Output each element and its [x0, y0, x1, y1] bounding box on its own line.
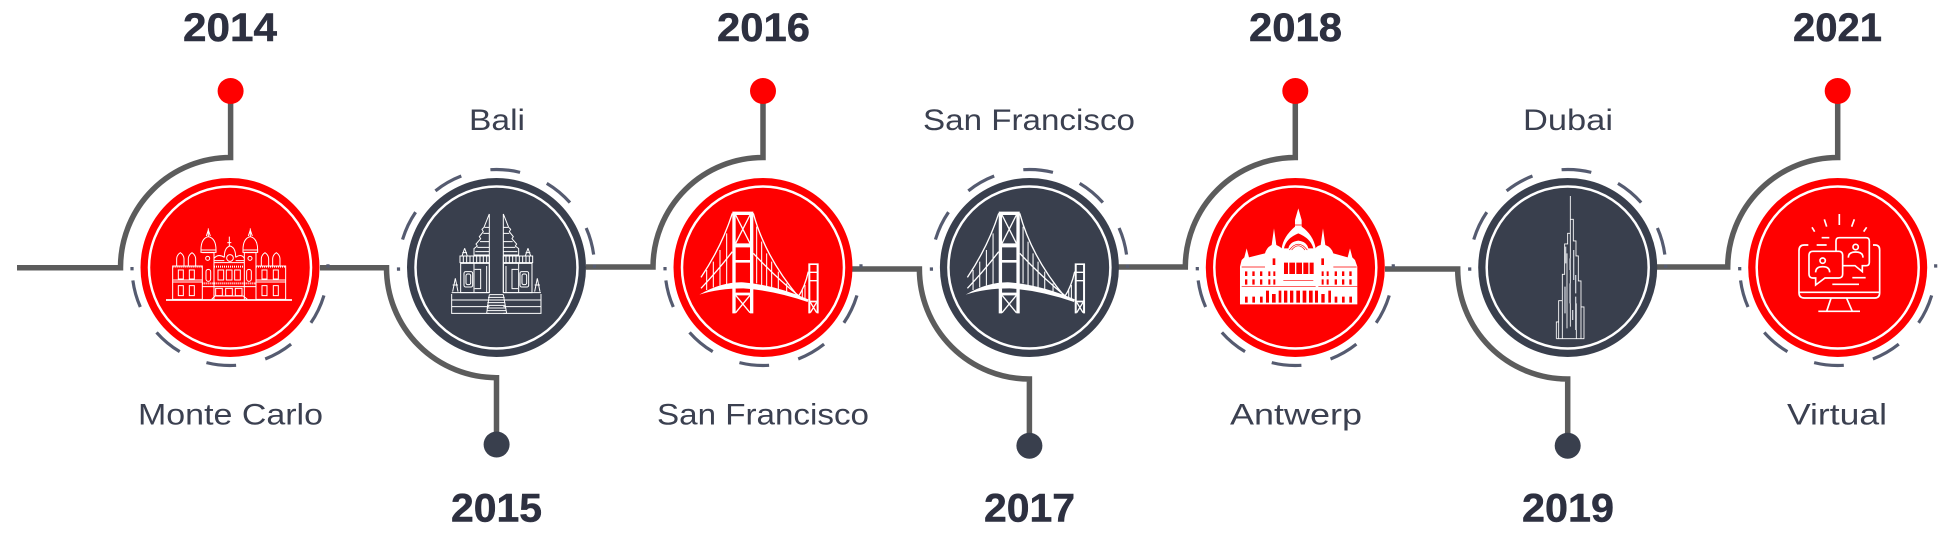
location: San Francisco: San Francisco	[923, 104, 1135, 137]
milestone 2017 San Francisco	[907, 104, 1152, 531]
location: Dubai: Dubai	[1523, 104, 1613, 137]
location: Antwerp: Antwerp	[1230, 398, 1362, 431]
dark pin	[1016, 433, 1042, 459]
icon: Bali split gate	[452, 214, 541, 313]
dark disc	[1478, 178, 1657, 357]
inner ring	[416, 186, 578, 348]
year 2018: 2018	[1249, 6, 1342, 50]
dark disc	[407, 178, 586, 357]
inner ring	[1214, 186, 1376, 348]
location: Monte Carlo: Monte Carlo	[138, 398, 323, 431]
red pin	[218, 78, 244, 104]
icon: Golden Gate bridge	[699, 212, 819, 313]
connector 2016	[586, 91, 763, 267]
red disc	[1206, 178, 1385, 357]
red pin	[1282, 78, 1308, 104]
location: Bali: Bali	[469, 104, 525, 137]
inner ring	[948, 186, 1110, 348]
inner ring	[149, 186, 311, 348]
year 2019: 2019	[1522, 487, 1614, 531]
year 2014: 2014	[183, 6, 278, 50]
dashed ring	[1173, 145, 1418, 390]
inner ring	[1757, 186, 1919, 348]
dashed ring	[1445, 145, 1690, 390]
icon: Monte Carlo casino	[166, 228, 292, 300]
icon: Burj Khalifa	[1556, 196, 1584, 339]
inner ring	[1487, 186, 1649, 348]
milestone 2019 Dubai	[1445, 104, 1690, 531]
milestone 2014 Monte Carlo	[108, 6, 352, 431]
red pin	[750, 78, 776, 104]
connector 2014	[17, 91, 231, 268]
milestone 2016 San Francisco	[641, 6, 885, 431]
location: Virtual: Virtual	[1787, 398, 1887, 431]
year 2015: 2015	[451, 487, 542, 531]
connector 2021	[1657, 91, 1838, 267]
dark pin	[1555, 433, 1581, 459]
dashed ring	[1715, 145, 1955, 390]
milestone 2015 Bali	[374, 104, 619, 531]
dashed ring	[374, 145, 619, 390]
connector 2015	[320, 268, 496, 444]
dark disc	[940, 178, 1119, 357]
red disc	[674, 178, 852, 357]
location: San Francisco: San Francisco	[657, 398, 869, 431]
dashed ring	[108, 145, 352, 390]
dashed ring	[641, 145, 885, 390]
icon: virtual meeting monitor	[1799, 214, 1880, 311]
dark pin	[484, 432, 510, 458]
red pin	[1825, 78, 1851, 104]
year 2016: 2016	[717, 6, 810, 50]
connector 2017	[852, 269, 1029, 445]
dashed ring	[907, 145, 1152, 390]
red disc	[1748, 178, 1927, 357]
connector 2018	[1118, 91, 1295, 267]
inner ring	[682, 186, 844, 348]
milestone 2018 Antwerp	[1173, 6, 1418, 431]
icon: Golden Gate bridge	[966, 212, 1085, 313]
year 2017: 2017	[984, 487, 1075, 531]
red disc	[140, 178, 320, 357]
connector 2019	[1385, 269, 1568, 445]
year 2021: 2021	[1793, 6, 1882, 50]
milestone 2021 Virtual	[1715, 6, 1955, 431]
icon: Antwerp station	[1240, 208, 1357, 304]
